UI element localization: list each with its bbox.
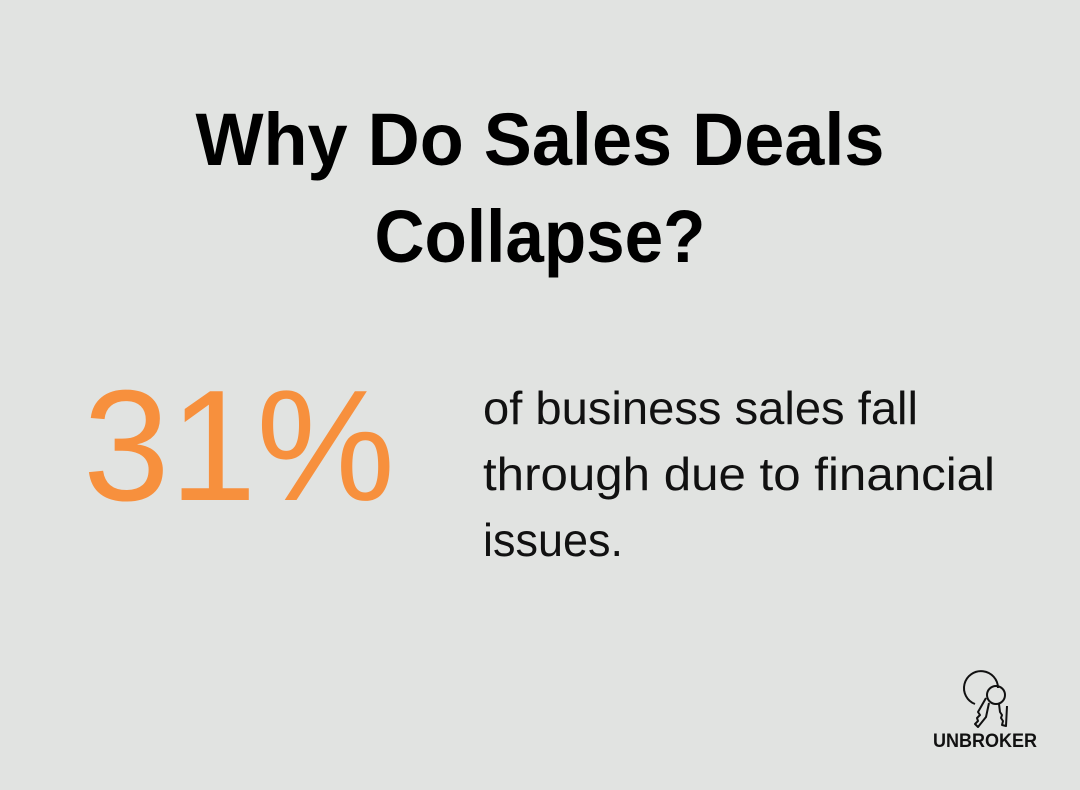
description text: issues. <box>483 514 623 566</box>
description text <box>483 382 995 566</box>
description text: through due to financial <box>483 448 995 500</box>
logo: unbroker keys <box>933 671 1037 752</box>
description text: of business sales fall <box>483 382 918 434</box>
big statistic: 31%: 31% <box>83 358 395 534</box>
title: Why Do Sales Deals <box>196 98 884 181</box>
logo wordmark: UNBROKER <box>933 731 1037 752</box>
icon: keys <box>964 671 1007 727</box>
title: Collapse? <box>374 195 706 278</box>
title <box>196 98 884 278</box>
